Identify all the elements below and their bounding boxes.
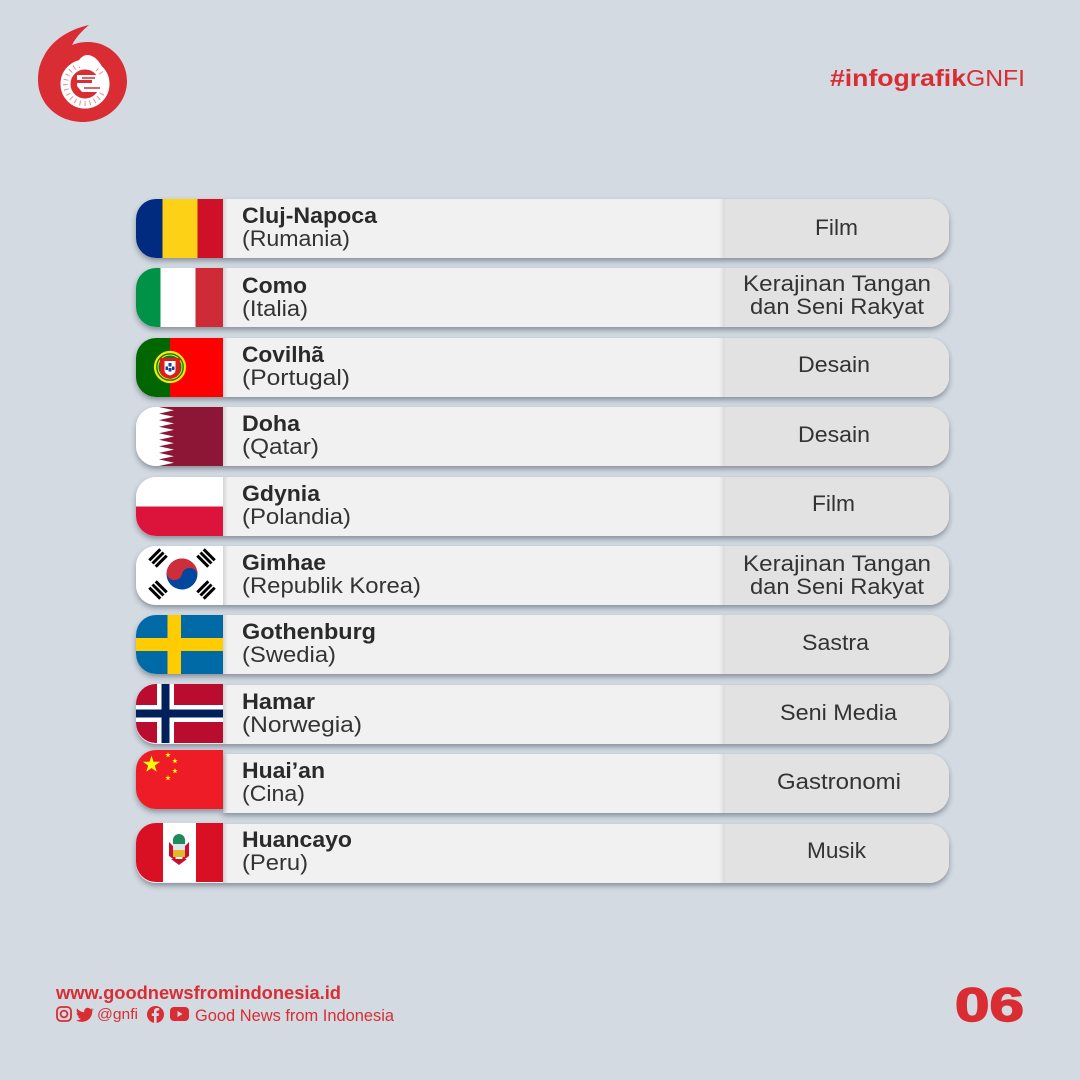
social row: [57, 1006, 395, 1025]
category: Desain: [798, 352, 870, 377]
flag: Italy: [136, 268, 224, 327]
flag: China: [136, 750, 224, 809]
row: Doha: [136, 407, 949, 466]
city and country: [242, 619, 376, 667]
city and country: Como: [242, 273, 307, 298]
category: Sastra: [802, 630, 870, 655]
handle: @gnfi: [97, 1006, 138, 1023]
row: Gdynia: [136, 477, 949, 536]
city and country: (Peru): [242, 850, 308, 875]
city and country: Gothenburg: [242, 619, 376, 644]
row: Covilhã: [136, 338, 949, 397]
category: [743, 551, 931, 599]
flag: Norway: [136, 684, 224, 743]
city and country: (Qatar): [242, 434, 319, 459]
category: dan Seni Rakyat: [750, 574, 924, 599]
row: Gothenburg: [136, 615, 949, 674]
page number: 06: [955, 978, 1024, 1031]
city and country: Hamar: [242, 689, 315, 714]
hashtag heading: [830, 65, 1025, 91]
icon: instagram: [57, 1007, 71, 1021]
hashtag heading: #infografik: [830, 65, 966, 91]
city and country: Cluj-Napoca: [242, 203, 378, 228]
website url: www.goodnewsfromindonesia.id: [55, 983, 341, 1003]
city and country: Doha: [242, 411, 301, 436]
city and country: (Norwegia): [242, 712, 362, 737]
category: Seni Media: [780, 700, 898, 725]
city and country: [242, 550, 421, 598]
city and country: Gdynia: [242, 481, 321, 506]
city and country: Huai’an: [242, 758, 325, 783]
logo: [38, 25, 127, 122]
city and country: (Republik Korea): [242, 573, 421, 598]
city and country: [242, 758, 325, 806]
flag: Sweden: [136, 615, 224, 674]
city and country: [242, 827, 352, 875]
category: Kerajinan Tangan: [743, 271, 931, 296]
row: Huancayo: [136, 823, 949, 883]
flag: Romania: [136, 199, 224, 258]
category: Film: [815, 215, 858, 240]
row: Huai'an: [136, 750, 949, 813]
category: Film: [812, 491, 855, 516]
flag: Portugal: [136, 338, 224, 397]
city and country: Gimhae: [242, 550, 326, 575]
city and country: (Rumania): [242, 226, 350, 251]
channel name: Good News from Indonesia: [195, 1006, 395, 1025]
city and country: [242, 411, 319, 459]
city and country: [242, 689, 362, 737]
category: dan Seni Rakyat: [750, 294, 924, 319]
city and country: (Italia): [242, 296, 308, 321]
row: Gimhae: [136, 546, 949, 605]
city and country: (Swedia): [242, 642, 336, 667]
city and country: (Polandia): [242, 504, 351, 529]
row: Como: [136, 268, 949, 327]
category: Musik: [807, 838, 867, 863]
icon: twitter: [76, 1008, 94, 1022]
row: Cluj-Napoca: [136, 199, 949, 258]
flag: South Korea: [136, 546, 224, 605]
category: Desain: [798, 422, 870, 447]
flag: Qatar: [136, 407, 224, 466]
city and country: (Portugal): [242, 365, 350, 390]
city and country: [242, 273, 308, 321]
city and country: Covilhã: [242, 342, 325, 367]
category: Gastronomi: [777, 769, 901, 794]
city and country: [242, 203, 378, 251]
icon: youtube: [170, 1007, 189, 1021]
city and country: [242, 342, 350, 390]
city and country: (Cina): [242, 781, 305, 806]
city and country: Huancayo: [242, 827, 352, 852]
flag: Peru: [136, 823, 224, 882]
category: Kerajinan Tangan: [743, 551, 931, 576]
icon: facebook: [147, 1006, 164, 1023]
city and country: [242, 481, 351, 529]
hashtag heading: GNFI: [966, 65, 1025, 91]
row: Hamar: [136, 684, 949, 744]
flag: Poland: [136, 477, 224, 536]
category: [743, 271, 931, 319]
